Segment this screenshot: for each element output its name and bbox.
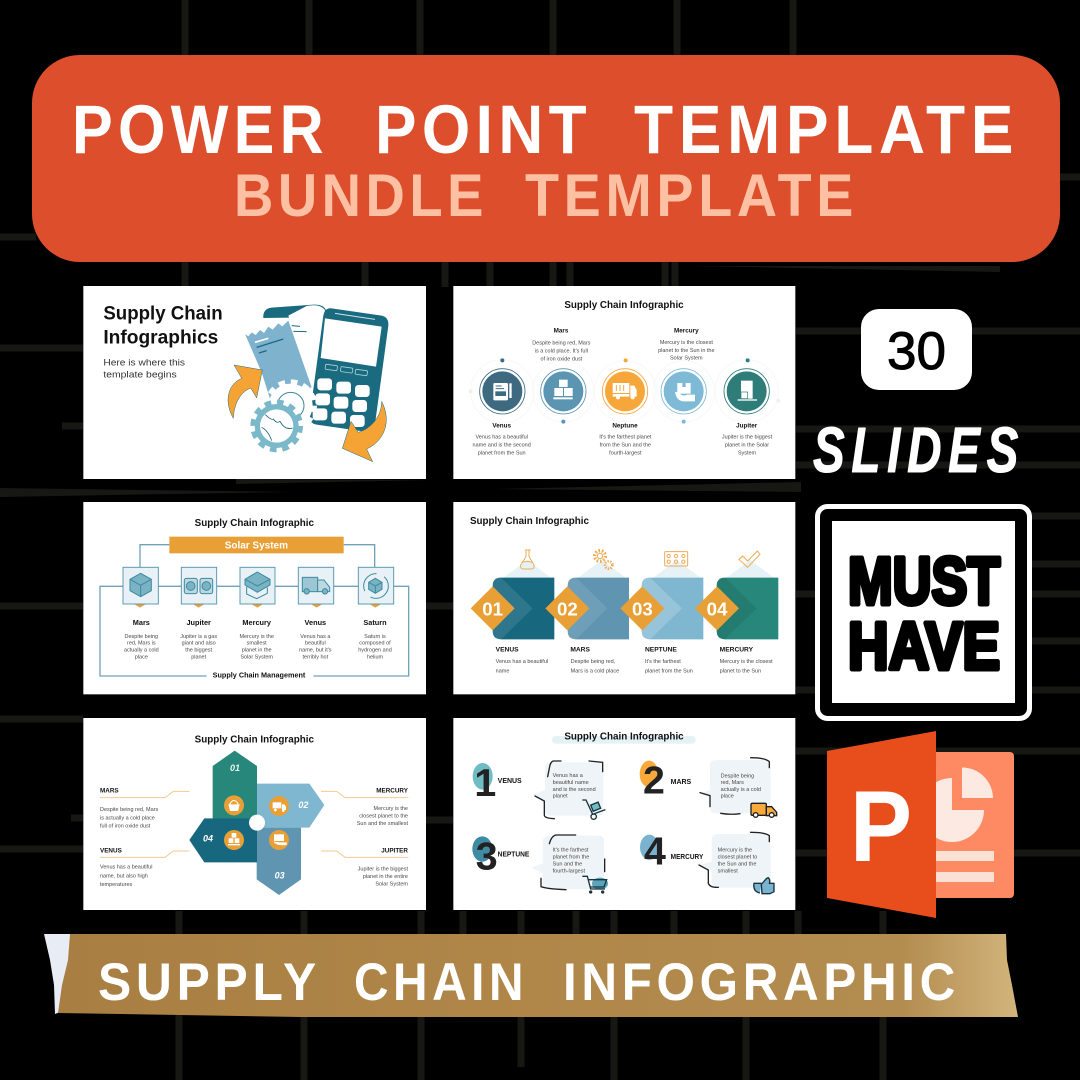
- step 04: MERCURY: [720, 647, 754, 654]
- text: Venus: temperatures: [100, 882, 133, 888]
- text: Mercury: smallest: [247, 641, 267, 647]
- text: Mercury: Mercury is the: [374, 806, 408, 812]
- text: Mars: MARS: [100, 788, 119, 795]
- icon box: Mercury open box: [240, 567, 275, 608]
- header banner: [32, 55, 1060, 262]
- item 3: Neptune: 3: [476, 834, 498, 878]
- item 2: Mars: MARS: [671, 779, 692, 786]
- icon box: Venus truck: [298, 567, 334, 608]
- slide title: Infographics: [103, 327, 218, 348]
- heading: Power Point Template: POINT: [375, 91, 592, 168]
- arrow 03: 03: [275, 871, 285, 881]
- item 1: Venus: planet: [553, 794, 568, 800]
- item 3: Neptune: [472, 834, 608, 894]
- text: Venus: VENUS: [100, 847, 122, 854]
- step 01: VENUS: [496, 647, 519, 654]
- slide subtitle: [103, 357, 185, 379]
- icon box: Saturn cycle: [358, 567, 394, 608]
- slide title: Supply Chain Infographic: [564, 300, 684, 311]
- panel: slide 6 speech bubbles: [453, 718, 795, 910]
- icon: delivery truck: [751, 803, 777, 817]
- circle: Jupiter: [724, 358, 769, 414]
- text: Mars: place: [135, 655, 148, 661]
- item 4: Mercury: Mercury is the: [718, 848, 752, 854]
- slide title: [103, 304, 223, 348]
- text: Neptune: It's the farthest planet: [599, 435, 652, 441]
- tape banner: Supply Chain Infographic: [58, 934, 1018, 1017]
- text: Mercury: planet in the: [242, 648, 272, 654]
- step 03: 03: [632, 598, 653, 619]
- text: Venus: Venus has a beautiful: [475, 435, 528, 441]
- heading: Power Point Template: [72, 91, 1019, 168]
- text: Venus: Venus: [492, 423, 511, 430]
- item 3: Neptune: NEPTUNE: [498, 852, 530, 859]
- item 4: Mercury: [640, 829, 774, 894]
- title pill: [552, 736, 696, 744]
- text: Saturn: Saturn is: [364, 634, 386, 640]
- text: Venus: beautiful: [305, 641, 326, 647]
- step 03: It's the farthest: [645, 659, 681, 665]
- text: Jupiter: Jupiter is a gas: [180, 634, 217, 640]
- text: Mars: Despite being red, Mars: [100, 807, 158, 813]
- arrow 04: [189, 818, 257, 862]
- arrow 01: 01: [230, 763, 240, 773]
- text: Venus: terribly hot: [303, 655, 329, 661]
- subheading: Bundle Template: TEMPLATE: [525, 162, 858, 229]
- icon box: Mars cube: [123, 567, 158, 608]
- text: Neptune: fourth-largest: [609, 451, 642, 457]
- illustration: calculator, receipt, gears, arrows: [228, 305, 388, 462]
- circle: Neptune: [602, 358, 648, 414]
- item 3: Neptune: It's the farthest: [553, 848, 589, 854]
- text: Jupiter: giant and also: [182, 641, 216, 647]
- text: Jupiter: JUPITER: [381, 847, 408, 854]
- text: Mercury: [239, 618, 274, 661]
- orange banner: Solar System: Solar System: [225, 541, 288, 552]
- step 04: planet to the Sun: [720, 668, 761, 674]
- step 04: [695, 551, 778, 674]
- text: Mars: Mars: [554, 327, 569, 334]
- step 03: NEPTUNE: [645, 647, 677, 654]
- arrow 04: 04: [203, 834, 213, 844]
- text: Jupiter: Jupiter is the biggest: [722, 435, 773, 441]
- center circle: [249, 815, 265, 831]
- slide title: Supply Chain: [103, 304, 223, 325]
- text: Mars: red, Mars is: [127, 641, 156, 647]
- panel: slide 5 arrow cross: [83, 718, 426, 910]
- item 2: Mars: Despite being: [721, 773, 754, 779]
- text: Mars: of iron oxide dust: [540, 356, 583, 362]
- panel: slide 4 numbered steps: [453, 502, 795, 694]
- text: Venus: name and is the second: [473, 443, 531, 449]
- text: Mercury: [357, 788, 409, 827]
- stamp: Must Have: MUST: [848, 544, 1000, 619]
- text: Mars: Despite being red, Mars: [532, 341, 591, 347]
- text: Neptune: from the Sun and the: [600, 443, 651, 449]
- arrow 03: [257, 828, 301, 895]
- item 1: Venus: [473, 761, 605, 819]
- text: Saturn: helium: [367, 655, 384, 661]
- item 2: Mars: actually is a cold: [721, 787, 761, 793]
- subheading: Bundle Template: [234, 162, 858, 229]
- text: Venus: Venus has a beautiful: [100, 865, 152, 871]
- slide title: Supply Chain Infographic: [564, 732, 684, 743]
- icon: boxes on hand: [269, 830, 289, 850]
- step 03: [620, 552, 703, 674]
- panel: slide 2 circles infographic: [453, 286, 795, 479]
- slide subtitle: template begins: [103, 369, 177, 379]
- icon: shopping cart: [582, 876, 608, 894]
- text: Jupiter: the biggest: [185, 648, 213, 654]
- text: Jupiter: planet: [191, 655, 207, 661]
- item 4: Mercury: smallest: [718, 868, 738, 874]
- slide subtitle: Here is where this: [103, 357, 185, 367]
- item 3: Neptune: Sun and the: [553, 861, 582, 867]
- subheading: Bundle Template: BUNDLE: [234, 162, 488, 229]
- footer label: Supply Chain Management: [213, 671, 306, 680]
- text: Neptune: [599, 423, 652, 457]
- panel: slide 1 title slide: [83, 286, 426, 479]
- text: Mars: [100, 788, 158, 830]
- slide title: Supply Chain Infographic: [195, 734, 315, 745]
- text: Mercury: Mercury: [674, 327, 699, 334]
- heading: Power Point Template: TEMPLATE: [634, 91, 1019, 168]
- step 01: name: [496, 668, 509, 674]
- circle: Mercury: [661, 369, 706, 424]
- text: Jupiter: [180, 618, 217, 661]
- text: Mars: Mars: [133, 618, 150, 627]
- badge: 30: 30: [887, 322, 946, 381]
- text: Venus: [299, 618, 332, 661]
- text: Mercury: MERCURY: [376, 788, 409, 795]
- item 2: Mars: place: [721, 794, 734, 800]
- arrow 02: [257, 784, 324, 828]
- step 02: Mars is a cold place: [571, 668, 619, 674]
- item 1: Venus: VENUS: [498, 778, 522, 785]
- text: Venus: name, but also high: [100, 873, 148, 879]
- step 01: [471, 550, 554, 674]
- item 1: Venus: and is the second: [553, 787, 596, 793]
- text: Mars: Despite being: [125, 634, 158, 640]
- tape banner: Supply Chain Infographic: CHAIN: [354, 953, 528, 1012]
- text: Mercury: closest planet to the: [359, 814, 408, 820]
- item 2: Mars: [640, 758, 777, 817]
- text: Venus: [100, 847, 152, 888]
- item 1: Venus: Venus has a: [553, 773, 584, 779]
- item 4: Mercury: closest planet to: [718, 855, 757, 861]
- text: Jupiter: Jupiter is the biggest: [358, 867, 408, 873]
- text: Venus: Venus has a: [300, 634, 331, 640]
- text: Saturn: hydrogen and: [358, 648, 392, 654]
- item 4: Mercury: 4: [644, 829, 666, 873]
- badge: 30: [861, 309, 972, 390]
- heading: Power Point Template: POWER: [72, 91, 329, 168]
- step 02: 02: [557, 598, 578, 619]
- step 03: planet from the Sun: [645, 668, 693, 674]
- text: Jupiter: Solar System: [375, 881, 408, 887]
- slide title: Supply Chain Infographic: [195, 518, 315, 529]
- text: Mars: is a cold place. It's full: [535, 348, 588, 354]
- icon: basket: [224, 795, 244, 815]
- step 01: 01: [482, 598, 503, 619]
- text: Mercury: Solar System: [670, 356, 703, 362]
- text: Jupiter: planet in the entire: [363, 874, 408, 880]
- slide title: Supply Chain Infographic: [470, 516, 590, 527]
- stamp: Must Have: HAVE: [848, 609, 1000, 684]
- item 2: Mars: red, Mars: [721, 780, 744, 786]
- text: Mercury: [658, 327, 715, 362]
- text: Mars: full of iron oxide dust: [100, 824, 151, 830]
- step 04: Mercury is the closest: [720, 659, 773, 665]
- text: Mars: [532, 327, 591, 362]
- arrow 01: [213, 751, 257, 825]
- text: Venus: name, but it's: [299, 648, 332, 654]
- text: Mercury: Solar System: [240, 655, 273, 661]
- circle: Mars: [541, 369, 586, 424]
- item 3: Neptune: planet from the: [553, 855, 589, 861]
- item 4: Mercury: the Sun and the: [718, 861, 756, 867]
- text: Jupiter: System: [738, 451, 757, 457]
- text: Mars: actually a cold: [124, 648, 159, 654]
- text: Jupiter: Jupiter: [186, 618, 211, 627]
- icon: thumbs up: [754, 878, 774, 894]
- step 02: MARS: [570, 647, 590, 654]
- icon box: Jupiter boxes: [181, 567, 217, 608]
- step 02: Despite being red,: [571, 659, 616, 665]
- item 3: Neptune: fourth-largest: [553, 868, 585, 874]
- item 2: Mars: 2: [643, 758, 665, 802]
- icon: PowerPoint logo: P: [850, 771, 912, 883]
- text: Venus: Venus: [305, 618, 326, 627]
- text: Saturn: [358, 618, 392, 661]
- step 01: Venus has a beautiful: [496, 659, 548, 665]
- text: Jupiter: planet in the Solar: [725, 443, 769, 449]
- text: Neptune: Neptune: [612, 423, 638, 430]
- text: Mercury: Mercury is the: [239, 634, 274, 640]
- icon: PowerPoint logo: [827, 731, 1014, 918]
- tape banner: Supply Chain Infographic: SUPPLY: [98, 953, 321, 1012]
- circle: Venus: [480, 358, 525, 414]
- text: Mercury: Mercury: [242, 618, 272, 627]
- step 02: [545, 551, 629, 674]
- tape banner: Supply Chain Infographic: INFOGRAPHIC: [563, 953, 960, 1012]
- arrow 02: 02: [298, 800, 308, 810]
- text: Venus: [473, 423, 531, 457]
- text: Mercury: Mercury is the closest: [660, 340, 713, 346]
- item 1: Venus: 1: [474, 761, 496, 805]
- orange banner: Solar System: [169, 537, 344, 553]
- text: Venus: planet from the Sun: [478, 451, 526, 457]
- text: Saturn: Saturn: [363, 618, 387, 627]
- text: Jupiter: Jupiter: [736, 423, 758, 430]
- torn paper edge: [44, 934, 76, 1014]
- text: Jupiter: [722, 423, 773, 457]
- icon: hand trolley: [582, 800, 605, 819]
- panel: slide 3 solar system flow: [83, 502, 426, 694]
- text: Mars: is actually a cold place: [100, 816, 155, 822]
- step 04: 04: [707, 598, 728, 619]
- text: Mercury: planet to the Sun in the: [658, 348, 715, 354]
- stamp: Must Have: [818, 506, 1030, 718]
- text: Mercury: Sun and the smallest: [357, 821, 408, 827]
- text: Saturn: composed of: [359, 641, 391, 647]
- item 4: Mercury: MERCURY: [671, 854, 704, 861]
- text: Jupiter: [358, 847, 408, 887]
- item 1: Venus: beautiful name: [553, 780, 589, 786]
- icon: pallet boxes: [224, 830, 244, 850]
- text: Mars: [124, 618, 159, 661]
- icon: truck: [269, 796, 289, 816]
